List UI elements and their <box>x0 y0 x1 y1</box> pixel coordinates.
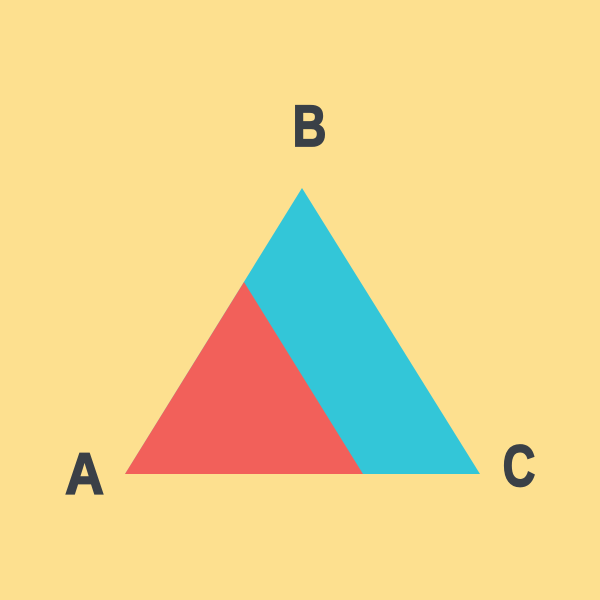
triangle: red sub-triangle <box>125 282 363 474</box>
label: B: B <box>293 94 326 159</box>
triangle: full cyan triangle <box>125 188 480 474</box>
label: C: C <box>503 435 535 500</box>
label: A: A <box>65 441 104 507</box>
